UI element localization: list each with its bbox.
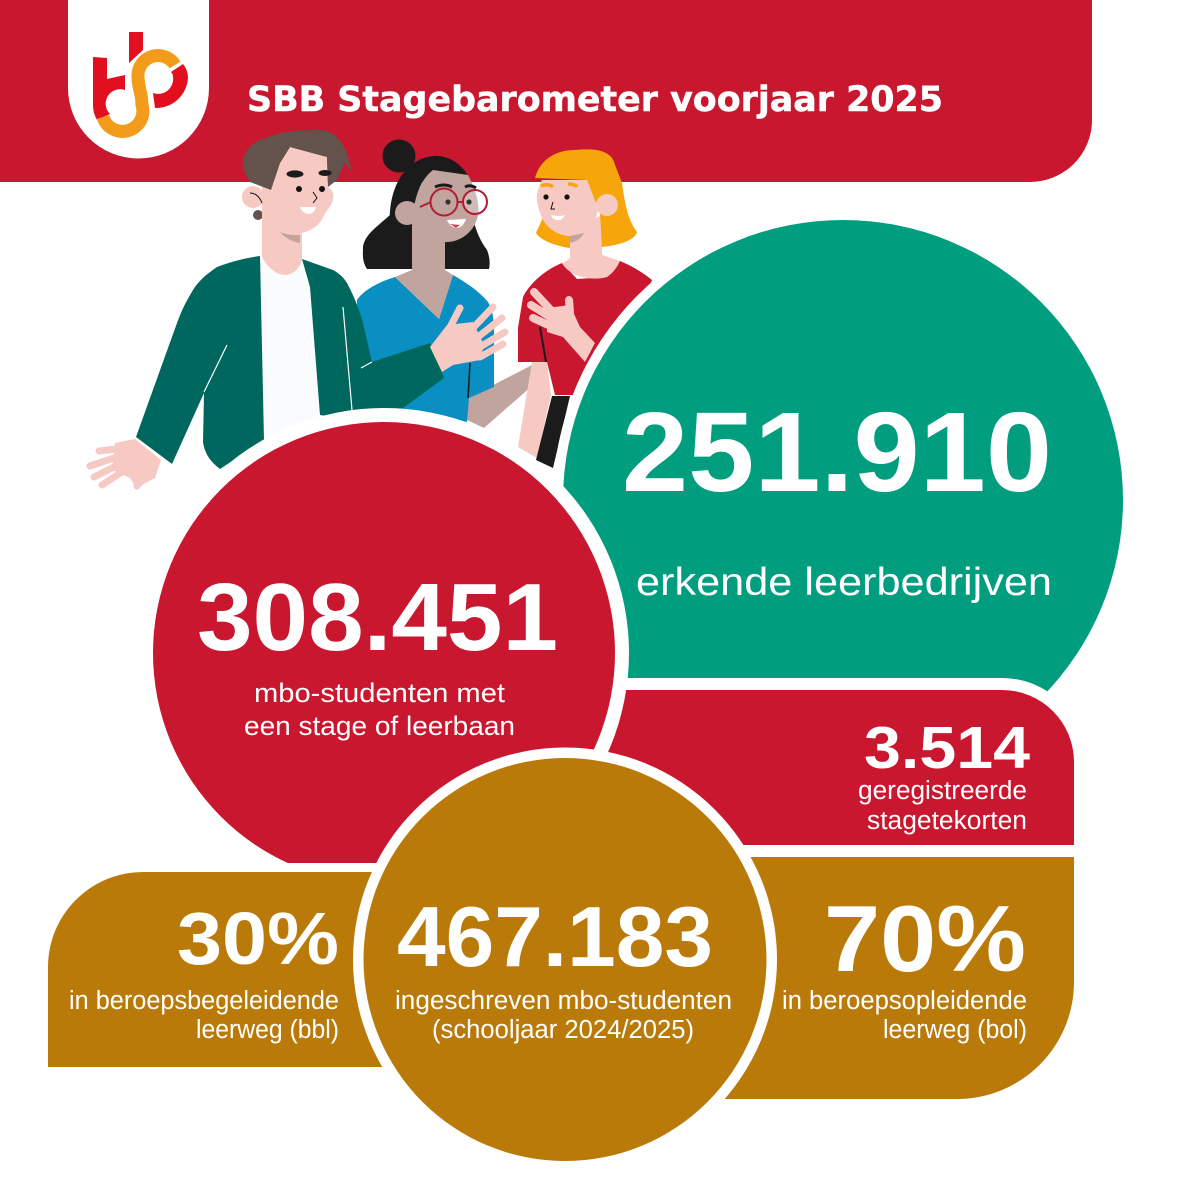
logo shield [68, 0, 209, 158]
panel: 70% bol [600, 857, 1074, 1099]
number: 70%: 70% [824, 886, 1026, 991]
number: 308.451: 308.451 [197, 564, 558, 671]
number: 3.514: 3.514 [864, 715, 1030, 781]
logo: orange s [103, 56, 175, 131]
label: erkende leerbedrijven: erkende leerbedrijven [636, 561, 1052, 604]
logo: right arc [153, 64, 188, 108]
label: ingeschreven mbo-studenten (schooljaar 2024/2025): (schooljaar 2024/2025) [432, 1016, 694, 1044]
label: ingeschreven mbo-studenten (schooljaar 2024/2025) [395, 987, 732, 1044]
panel: 30% bbl [48, 872, 420, 1067]
panel: brown circle, ingeschreven mbo-studenten [353, 748, 777, 1172]
label: mbo-studenten met een stage of leerbaan: mbo-studenten met [254, 678, 506, 708]
label: geregistreerde stagetekorten: stagetekorten [867, 807, 1027, 835]
number: 30%: 30% [177, 897, 339, 980]
label: in beroepsbegeleidende leerweg (bbl): in beroepsbegeleidende [69, 987, 339, 1015]
illustration: three people [90, 130, 652, 488]
label: mbo-studenten met een stage of leerbaan: een stage of leerbaan [244, 711, 515, 741]
panel: green circle, erkende leerbedrijven [553, 210, 1133, 790]
header banner [0, 0, 1092, 182]
label: in beroepsopleidende leerweg (bol) [782, 987, 1027, 1044]
label: in beroepsbegeleidende leerweg (bbl): leerweg (bbl) [196, 1016, 339, 1044]
label: in beroepsopleidende leerweg (bol): in beroepsopleidende [782, 987, 1027, 1015]
title: SBB Stagebarometer voorjaar 2025 [247, 80, 943, 120]
label: geregistreerde stagetekorten: geregistreerde [858, 777, 1027, 805]
label: in beroepsopleidende leerweg (bol): leerweg (bol) [883, 1016, 1027, 1044]
logo: left b [93, 57, 125, 120]
panel: red box, stagetekorten [590, 690, 1074, 845]
person: woman with glasses [357, 140, 533, 428]
logo: stem [129, 32, 143, 63]
label: in beroepsbegeleidende leerweg (bbl) [69, 987, 339, 1044]
number: 251.910: 251.910 [622, 389, 1052, 515]
label: mbo-studenten met een stage of leerbaan [244, 678, 515, 741]
label: ingeschreven mbo-studenten (schooljaar 2024/2025): ingeschreven mbo-studenten [395, 987, 732, 1015]
person: blonde woman [518, 149, 652, 468]
person: man in green jacket [90, 130, 505, 488]
panel: red circle, mbo-studenten met stage [139, 408, 629, 898]
number: 467.183: 467.183 [397, 890, 713, 985]
label: geregistreerde stagetekorten [858, 777, 1027, 835]
